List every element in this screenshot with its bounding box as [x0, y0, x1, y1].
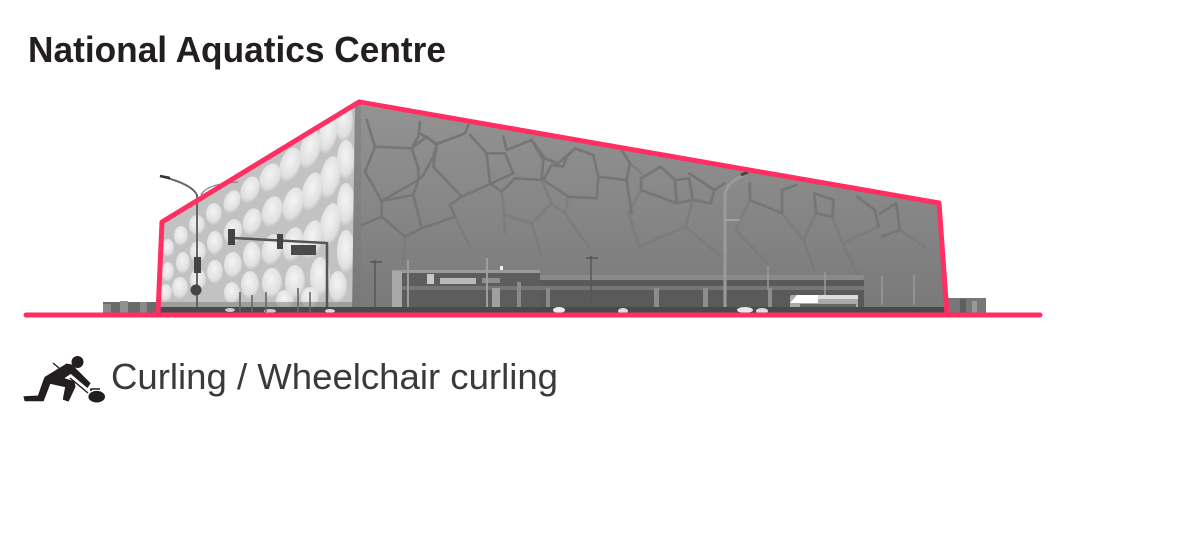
left hedges: [103, 301, 159, 314]
entrance sign: [427, 274, 500, 284]
title: National Aquatics Centre: [28, 29, 446, 70]
sport label: Curling / Wheelchair curling: [111, 356, 558, 397]
bus: [790, 295, 858, 313]
infographic canvas: [24, 36, 1042, 402]
entrance hall: [392, 266, 864, 314]
pink ground line: [26, 312, 1040, 318]
left facade with bubbles: [160, 108, 355, 307]
street level traffic: [159, 288, 946, 314]
street poles: [370, 256, 914, 314]
facade cell lines, left part: [360, 118, 643, 238]
left lamp post: [160, 176, 238, 314]
building photo: [103, 100, 986, 316]
right lamp post: [725, 172, 748, 314]
icon: curling athlete: [24, 356, 105, 403]
facade cell lines, right part: [628, 165, 902, 238]
right facade: [350, 100, 950, 316]
pink building outline: [158, 102, 947, 314]
right hedges: [948, 298, 986, 314]
traffic signals: [190, 229, 327, 310]
